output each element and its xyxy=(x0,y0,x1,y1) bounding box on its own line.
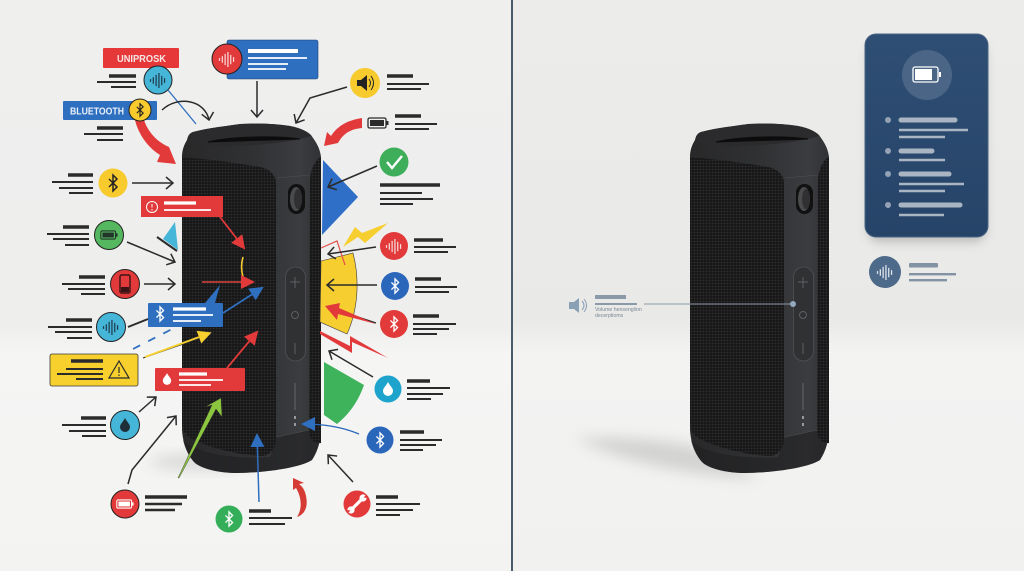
callout: red water xyxy=(155,332,257,391)
item: yellow speaker xyxy=(296,68,429,123)
text bars: bluetooth label xyxy=(84,128,123,140)
list: battery details xyxy=(885,117,968,215)
shape: yellow fan xyxy=(320,253,357,334)
item: audio wave xyxy=(869,256,956,288)
arrow: yellow xyxy=(143,333,210,358)
item: red wave xyxy=(328,232,456,260)
accent: black line by triangle xyxy=(157,237,177,251)
item: cyan wave icon with text xyxy=(97,66,172,94)
label: BLUETOOTH xyxy=(63,99,157,121)
item: red wrench xyxy=(328,455,420,518)
item: green bluetooth xyxy=(216,506,292,532)
pointer: blue line xyxy=(168,90,196,124)
item: cyan wave xyxy=(48,312,148,342)
item: yellow bluetooth xyxy=(52,168,173,198)
callout: yellow warning xyxy=(50,354,138,386)
item: cyan drop xyxy=(329,351,450,402)
arrow: red curved thick xyxy=(135,120,176,164)
accent: red lightning xyxy=(320,331,388,358)
icon: battery xyxy=(902,50,952,100)
callout: volume xyxy=(569,295,796,319)
accent: red polyline xyxy=(321,241,345,265)
item: blue bluetooth xyxy=(327,272,457,300)
panel: clean speaker (right) xyxy=(513,0,1024,571)
callout: volume: Volume hensenglion xyxy=(595,307,642,313)
item: battery with red arrow xyxy=(324,116,437,146)
arrow: blue upward xyxy=(257,435,259,502)
shape: cyan triangle xyxy=(163,222,178,250)
speaker left shadow xyxy=(150,454,250,470)
card: battery info xyxy=(865,34,988,237)
item: green check xyxy=(328,148,440,204)
divider xyxy=(511,0,513,571)
arrow: black curved xyxy=(162,101,209,120)
speaker shadow xyxy=(575,438,760,478)
item: green battery xyxy=(47,220,175,262)
arrow: long black xyxy=(128,416,176,484)
accent: yellow lightning xyxy=(343,223,388,247)
accent: yellow curved tick xyxy=(242,257,243,277)
arrow: red curved bottom xyxy=(293,478,307,517)
callout: red alert xyxy=(141,196,244,248)
shape: green fan xyxy=(324,362,364,424)
label: UNIPROSK xyxy=(103,48,179,68)
item: cyan water drop xyxy=(62,397,156,440)
speaker photo annotated xyxy=(182,124,321,473)
item: red bluetooth xyxy=(325,303,456,338)
item: red battery xyxy=(111,490,187,518)
item: blue bluetooth lower xyxy=(303,424,442,454)
callout: volume: decerptioms xyxy=(595,313,624,319)
line: blue dashed xyxy=(133,327,176,349)
card shadow xyxy=(868,44,986,242)
arrow: red horizontal xyxy=(202,281,253,283)
item: red phone xyxy=(62,270,175,298)
callout: blue box with red wave icon xyxy=(212,40,318,117)
arrow: green xyxy=(178,398,222,478)
shape: blue triangle xyxy=(322,160,358,235)
callout: blue bluetooth xyxy=(148,285,262,327)
label: BLUETOOTH: BLUETOOTH xyxy=(70,106,124,118)
label: UNIPROSK: UNIPROSK xyxy=(117,53,166,65)
panel: annotated speaker (left) xyxy=(0,0,512,571)
speaker photo clean xyxy=(690,124,829,473)
